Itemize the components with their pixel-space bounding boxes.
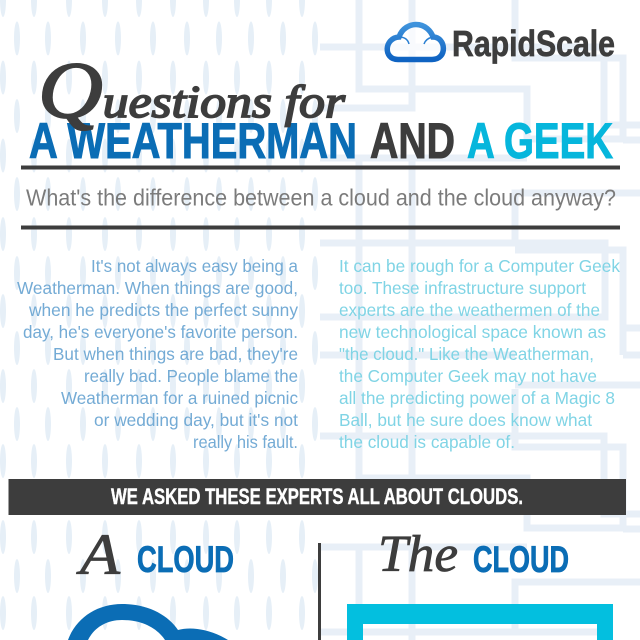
- heading: A Cloud: [75, 522, 234, 587]
- text block: computer geek: the Computer Geek may not have: [339, 366, 597, 386]
- text block: weatherman: day, he's everyone's favorite person.: [23, 322, 298, 342]
- text block: computer geek: new technological space known as: [339, 322, 606, 342]
- icon: cloud logo: [387, 24, 443, 60]
- text block: computer geek: all the predicting power of a Magic 8: [339, 388, 615, 408]
- text block: computer geek: Ball, but he sure does know what: [339, 410, 592, 430]
- text block: weatherman: But when things are bad, they're: [53, 344, 298, 364]
- text block: weatherman: [17, 256, 298, 452]
- text block: weatherman: Weatherman for a ruined picnic: [61, 388, 298, 408]
- banner: [8, 479, 626, 515]
- text block: computer geek: It can be rough for a Computer Geek: [339, 256, 620, 276]
- text block: computer geek: too. These infrastructure support: [339, 278, 586, 298]
- text block: weatherman: It's not always easy being a: [91, 256, 298, 276]
- text block: weatherman: when he predicts the perfect sunny: [28, 300, 298, 320]
- subtitle: What's the difference between a cloud and the cloud anyway?: [26, 184, 616, 210]
- title: And: AND: [370, 113, 455, 169]
- heading: The Cloud: The: [378, 526, 458, 583]
- text block: computer geek: experts are the weathermen of the: [339, 300, 600, 320]
- heading: The Cloud: CLOUD: [473, 539, 569, 580]
- text block: computer geek: [339, 256, 620, 452]
- text block: weatherman: or wedding day, but it's not: [94, 410, 298, 430]
- title: [29, 47, 613, 169]
- heading: A Cloud: CLOUD: [137, 539, 234, 580]
- background: raindrop pattern: [0, 0, 318, 630]
- divider: top rule: [21, 166, 620, 170]
- logo: RapidScale: [387, 23, 615, 64]
- heading: The Cloud: [378, 526, 569, 583]
- text block: weatherman: really bad. People blame the: [84, 366, 298, 386]
- divider: vertical column rule: [318, 543, 321, 640]
- background: circuit lines: [320, 0, 640, 640]
- text block: weatherman: Weatherman. When things are good,: [17, 278, 298, 298]
- text block: computer geek: the cloud is capable of.: [339, 432, 515, 452]
- divider: bottom rule: [21, 226, 620, 230]
- panel: the cloud box: [347, 604, 613, 640]
- text block: weatherman: really his fault.: [193, 432, 298, 452]
- heading: A Cloud: A: [75, 522, 121, 587]
- banner: WE ASKED THESE EXPERTS ALL ABOUT CLOUDS.: [111, 484, 523, 509]
- text block: computer geek: "the cloud." Like the Weatherman,: [339, 344, 594, 364]
- title: handwritten Questions for: Questions for: [38, 47, 346, 135]
- icon: large blue cloud: [68, 604, 228, 640]
- title: A Weatherman: A WEATHERMAN: [29, 113, 357, 169]
